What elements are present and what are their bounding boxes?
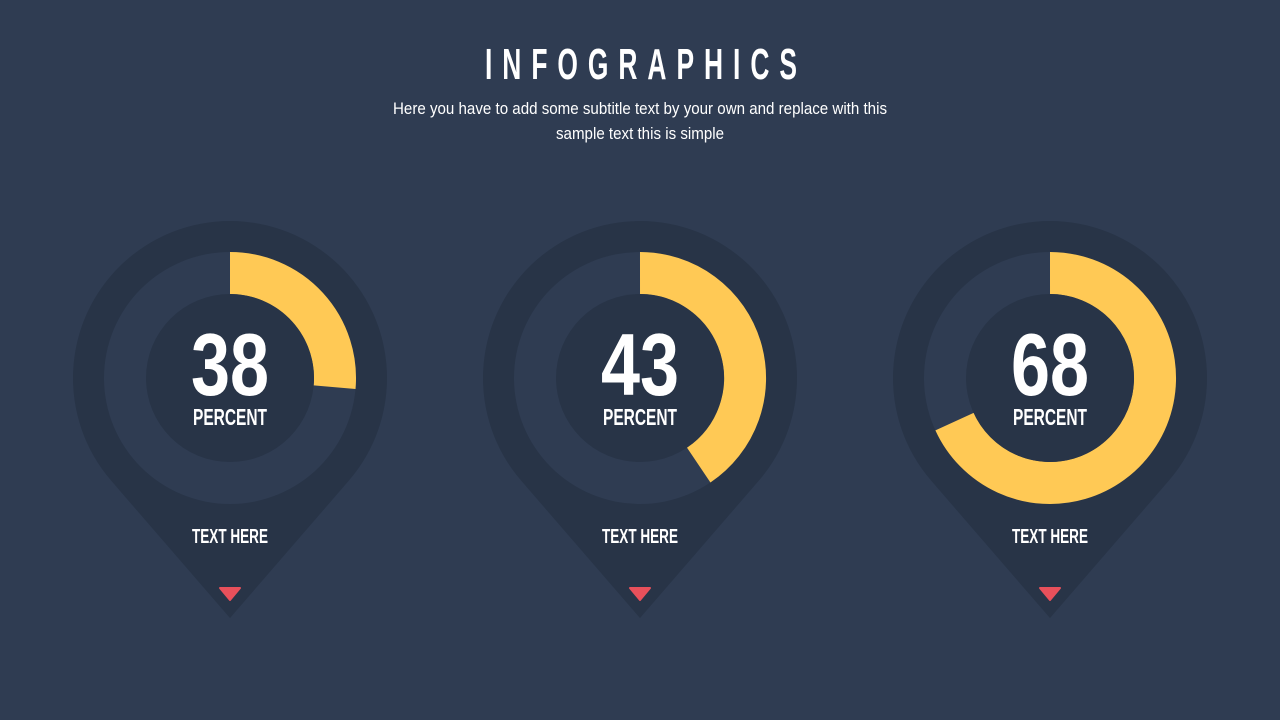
label percent: PERCENT [1013,404,1087,430]
number: 38 [191,315,269,414]
label percent: PERCENT [603,404,677,430]
subtitle [393,99,887,143]
number: 43 [601,315,679,414]
label percent: PERCENT [193,404,267,430]
arc 38 [230,273,335,387]
subtitle: sample text this is simple [556,124,724,143]
text here: TEXT HERE [602,526,678,548]
panel: pin 38 [73,221,387,618]
arc 68 [954,273,1155,483]
icon: red triangle [220,588,240,600]
icon: red triangle [630,588,650,600]
arc 43 [640,273,745,465]
number: 68 [1011,315,1089,414]
text here: TEXT HERE [1012,526,1088,548]
panel: pin 43 [483,221,797,618]
subtitle: Here you have to add some subtitle text by your own and replace with this [393,99,887,118]
panel: pin 68 [893,221,1207,618]
title: INFOGRAPHICS [485,39,797,89]
text here: TEXT HERE [192,526,268,548]
icon: red triangle [1040,588,1060,600]
